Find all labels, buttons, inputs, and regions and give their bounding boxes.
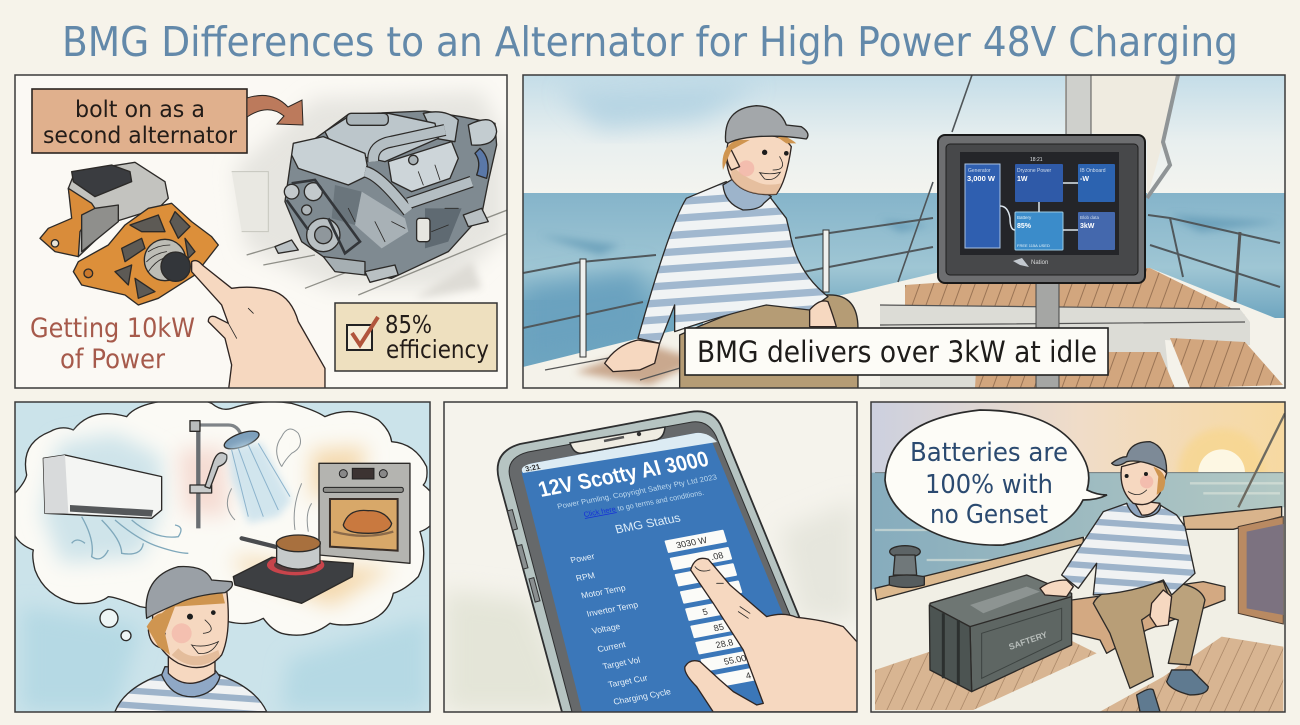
tile: battery: FREE 115A USED (1017, 243, 1050, 248)
tile: dc power: 1W (1017, 176, 1028, 183)
text: getting 10kW: Getting 10kW (30, 313, 195, 344)
sun (1176, 427, 1266, 472)
tile: dc power (1015, 164, 1063, 202)
text: of power: of Power (60, 344, 166, 375)
callout: 3kW at idle (685, 328, 1108, 375)
icon: winch (889, 546, 924, 587)
phone screen content: RPM (575, 570, 596, 583)
icon: display monitor (938, 135, 1145, 283)
phone screen content: 3030 W (675, 535, 709, 550)
callout: speech bubble: 100% with (925, 470, 1053, 500)
panel: batteries full (870, 400, 1290, 715)
tile: generator: 3,000 W (967, 174, 996, 183)
tile: generator (965, 164, 1000, 248)
callout: efficiency: efficiency (386, 335, 489, 364)
sail and mast (898, 75, 1178, 282)
icon: battery (929, 575, 1072, 692)
icon: hand tapping phone (685, 558, 858, 712)
phone screen content: Target Vol (601, 655, 641, 671)
phone screen content: Power (569, 551, 596, 565)
tile: ac input: -W (1080, 176, 1089, 183)
phone screen content: Power Pumling. Copyright Saftety Pty Ltd 2023 (556, 472, 718, 511)
bench (1072, 582, 1225, 653)
railing (523, 215, 1280, 328)
callout: speech bubble (885, 410, 1107, 545)
callout: 3kW at idle: BMG delivers over 3kW at idle (697, 335, 1097, 369)
phone screen content: Click here to go terms and conditions. (582, 488, 705, 519)
icon: sailor smiling (1040, 442, 1208, 712)
thought bubble (12, 399, 438, 635)
tile: loads: 3kW (1080, 223, 1095, 230)
tile: battery (1015, 212, 1063, 250)
icon: pointing hand (192, 261, 325, 392)
callout: bolt on: bolt on as a (75, 97, 205, 123)
panel: idle power on deck (523, 75, 1285, 390)
phone screen content: 85 (712, 622, 725, 633)
callout: bolt on: second alternator (43, 123, 238, 149)
phone screen content: Target Cur (607, 673, 649, 689)
phone screen content: 12V Scotty AI 3000 (535, 446, 712, 502)
rope (1238, 413, 1285, 507)
hull and deck (524, 268, 1275, 373)
phone screen content: Voltage (591, 621, 622, 636)
icon: shower (190, 421, 312, 532)
phone screen content: 3:21 (524, 462, 541, 473)
phone screen content: 4 (744, 670, 752, 681)
callout: speech bubble: no Genset (930, 500, 1048, 530)
tile: loads: Blob data (1080, 215, 1100, 220)
tile: dc power: Dryzone Power (1017, 168, 1052, 174)
panel: dream of appliances (12, 399, 438, 712)
icon: battery: SAFTERY (1007, 629, 1049, 652)
phone screen content: Charging Cycle (612, 686, 672, 707)
icon: person thinking (115, 566, 267, 712)
phone screen content (525, 452, 754, 704)
boat hull (872, 507, 1284, 593)
icon: induction hob and pan (233, 535, 353, 603)
panel: bolt-on alternator (15, 75, 512, 392)
callout: efficiency (335, 303, 497, 371)
phone screen content: BMG Status (613, 511, 682, 536)
tile: ac input: IB Onboard (1080, 168, 1106, 174)
phone screen content: 55.00 (723, 653, 748, 667)
tile: generator: Generator (968, 168, 991, 174)
icon: smartphone (496, 410, 800, 712)
pole (1036, 280, 1059, 388)
text: brand: Nation (1031, 260, 1048, 266)
phone screen content: .08 (709, 550, 725, 562)
thought dots (100, 609, 131, 641)
tile: battery: Battery (1017, 215, 1032, 220)
tile: loads (1078, 212, 1115, 250)
phone screen content: 28.8 (714, 637, 734, 650)
phone screen content: Invertor Temp (585, 599, 639, 619)
panel: phone status (444, 402, 858, 712)
icon: marine engine (275, 111, 497, 282)
callout: speech bubble: Batteries are (910, 438, 1068, 468)
arrow: to engine (247, 95, 303, 125)
icon: air conditioner (43, 455, 188, 559)
icon: sailor (605, 106, 858, 390)
icon: oven (319, 463, 410, 563)
tile: ac input (1078, 164, 1115, 202)
cabin window (1238, 517, 1283, 624)
icon: display monitor: 18:21 (1030, 157, 1043, 163)
lower deck (875, 640, 1097, 710)
callout: bolt on (32, 89, 247, 153)
phone screen content: 5 (701, 607, 709, 617)
tile: battery: 85% (1017, 223, 1032, 230)
phone screen content: Motor Temp (580, 583, 627, 600)
phone screen content: Current (596, 639, 627, 654)
icon: orange alternator (40, 162, 218, 305)
callout: efficiency: 85% (385, 310, 432, 339)
